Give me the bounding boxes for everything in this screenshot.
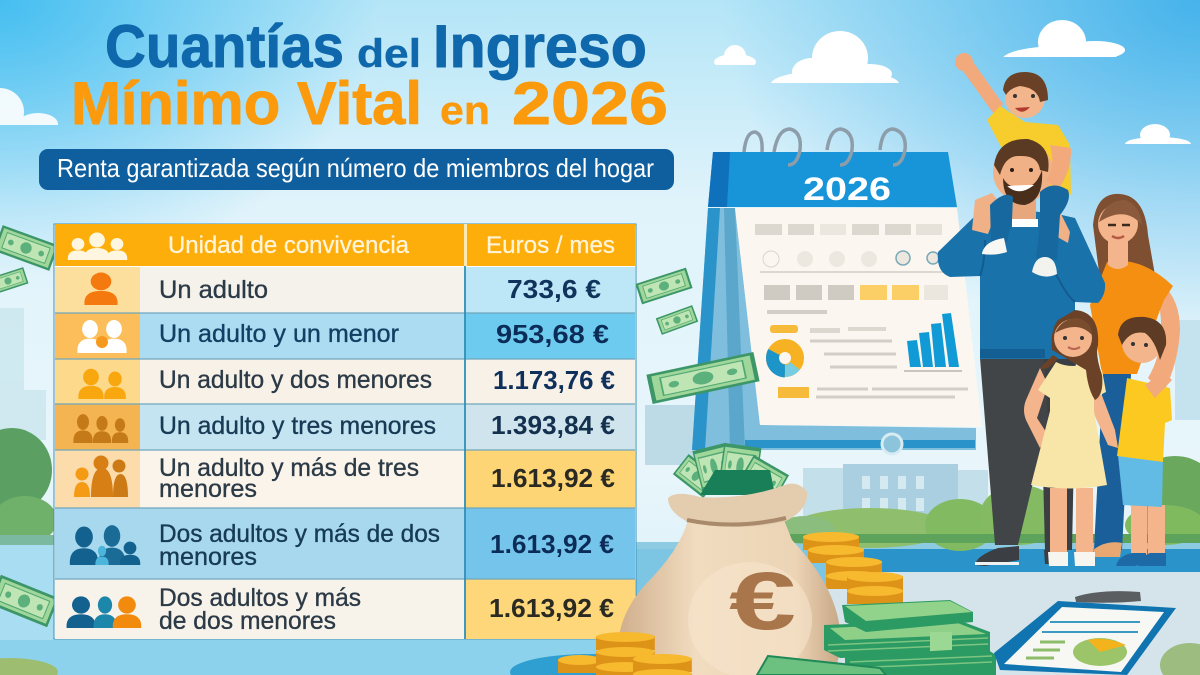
woman (1090, 194, 1180, 557)
calendar page (735, 208, 982, 427)
banknote floating near calendar middle (657, 306, 697, 334)
money bag (618, 445, 840, 675)
calendar back pages (692, 208, 976, 450)
man (938, 139, 1105, 566)
row: dos adultos y mas de dos menores: Dos adultos y más de dos (159, 520, 440, 548)
row: un adulto y mas de tres menores: Un adulto y más de tres (159, 454, 419, 482)
row: un adulto y tres menores: 1.393,84 € (491, 410, 615, 440)
boy (1116, 317, 1172, 566)
bushes right (775, 456, 1200, 551)
city buildings middle (645, 320, 1200, 526)
row: un adulto: Un adulto (159, 276, 268, 304)
bottom left water (0, 545, 670, 675)
table header: Unidad de convivencia (168, 232, 410, 259)
title: 2026 (512, 70, 668, 137)
row: dos adultos y mas de dos menores: menores (159, 543, 257, 571)
row: un adulto y dos menores: Un adulto y dos menores (159, 366, 432, 394)
cash stacks (757, 600, 996, 675)
calendar bar chart (904, 313, 962, 372)
clipboard (994, 591, 1176, 675)
row: un adulto y mas de tres menores: menores (159, 475, 257, 503)
row: un adulto y dos menores: 1.173,76 € (493, 365, 615, 395)
banknote floating near calendar top (637, 269, 691, 303)
row: un adulto y dos menores (55, 359, 635, 404)
row: dos adultos y mas de dos menores segunda fila: 1.613,92 € (489, 593, 614, 623)
girl (1024, 310, 1118, 566)
banknotes in bag (674, 445, 788, 500)
calendar donut chart (772, 346, 798, 371)
row: dos adultos y mas de dos menores segunda fila: Dos adultos y más (159, 584, 361, 612)
coin stacks (803, 532, 903, 604)
title: Ingreso (433, 13, 647, 80)
row: un adulto: 733,6 € (507, 274, 601, 304)
row: dos adultos y mas de dos menores (55, 508, 635, 579)
subtitle banner (39, 149, 674, 190)
row: un adulto y mas de tres menores: 1.613,92 € (491, 463, 615, 493)
title: Mínimo Vital (71, 70, 422, 137)
bag ruffle (668, 484, 807, 527)
title (71, 13, 668, 137)
faint city background left (0, 308, 46, 440)
calendar (692, 129, 982, 454)
euro symbol: € (729, 556, 796, 647)
bag body (618, 520, 840, 675)
title: en (440, 89, 490, 133)
floating banknote top left (0, 227, 57, 269)
title: Cuantías (105, 13, 344, 80)
row: dos adultos y mas de dos menores segunda fila: de dos menores (159, 607, 336, 635)
table header: Euros / mes (486, 232, 615, 259)
row: dos adultos y mas de dos menores segunda fila (55, 579, 635, 639)
small coins (558, 632, 692, 675)
title: del (357, 32, 421, 76)
calendar content blocks (755, 224, 968, 398)
ground and floor (636, 542, 1200, 675)
row: un adulto y tres menores: Un adulto y tres menores (159, 412, 436, 440)
table header (55, 224, 635, 266)
table (54, 224, 636, 639)
clouds (0, 20, 1191, 151)
calendar header (708, 152, 957, 207)
family (938, 53, 1180, 566)
bush bottom right (1160, 643, 1200, 675)
child torso and arm (955, 53, 1071, 195)
floating banknote bottom left (0, 577, 57, 625)
row: dos adultos y mas de dos menores: 1.613,92 € (490, 529, 614, 559)
floating banknote left small (0, 268, 28, 294)
bushes left (0, 428, 57, 545)
row: un adulto y un menor: Un adulto y un menor (159, 320, 399, 348)
row: un adulto y mas de tres menores (55, 450, 635, 508)
calendar year: 2026 (803, 171, 891, 207)
row: un adulto y tres menores (55, 404, 635, 450)
calendar bottom ring (882, 434, 902, 454)
row: un adulto y un menor: 953,68 € (496, 319, 609, 349)
child on shoulders (982, 72, 1071, 277)
subtitle banner: Renta garantizada según número de miembros del hogar (57, 153, 654, 183)
row: un adulto y un menor (55, 313, 635, 359)
calendar rings (744, 129, 905, 165)
row: un adulto (55, 267, 635, 313)
banknote floating large (649, 354, 757, 402)
